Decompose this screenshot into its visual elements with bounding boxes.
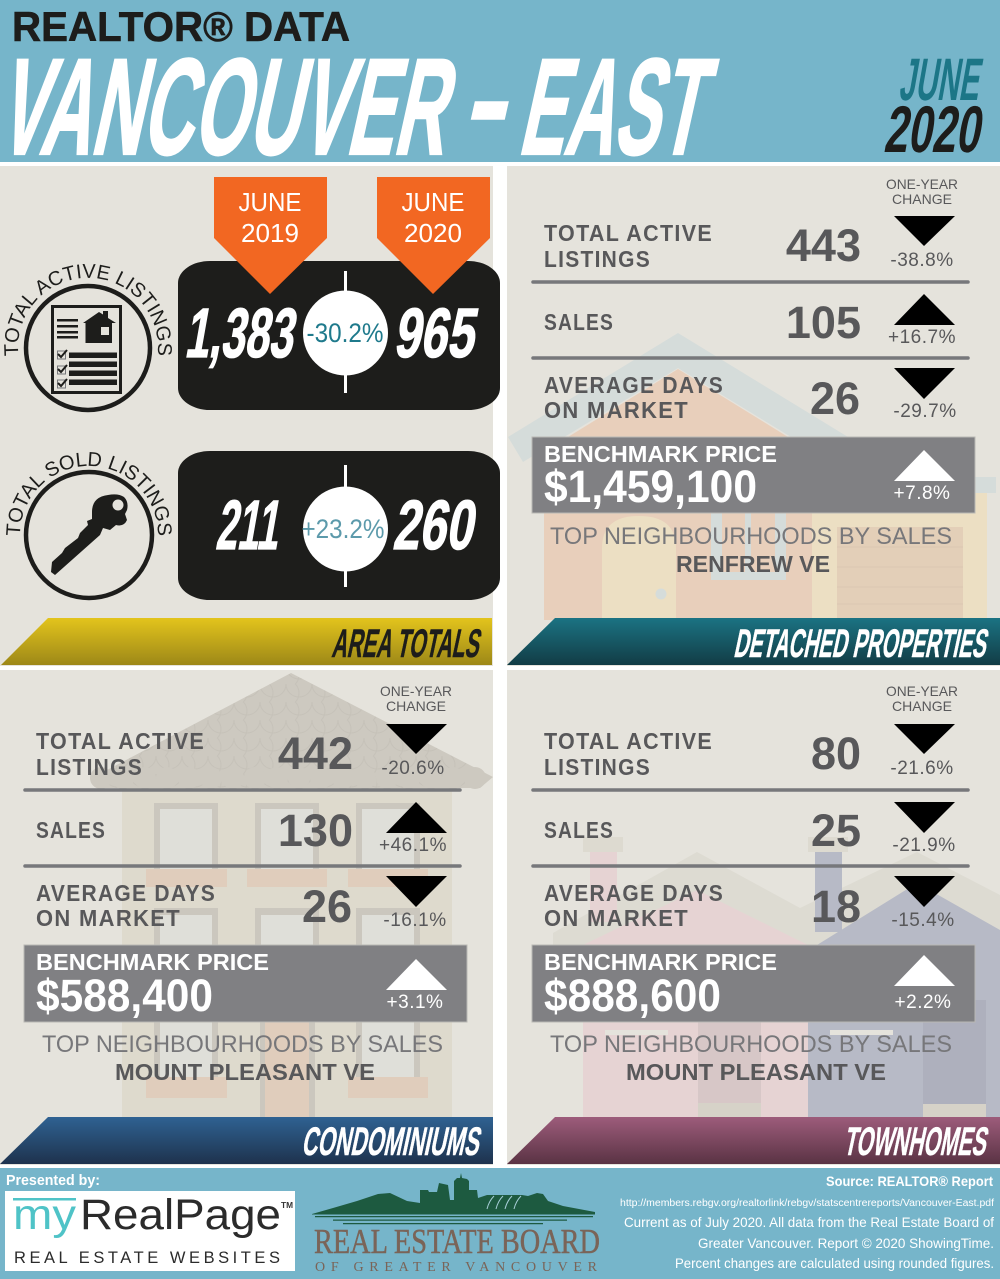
source notes: http://members.rebgv.org/realtorlink/rebgv/statscentrereports/Vancouver-East.pdf (620, 1198, 994, 1209)
panel: condominiums (0, 670, 493, 1165)
stat: active listings: TOTAL ACTIVE (36, 728, 205, 754)
stat: sales: -21.9% (892, 835, 956, 856)
top neighbourhoods (42, 1031, 443, 1085)
heading: REALTOR DATA: REALTOR® DATA (12, 3, 350, 50)
tag: June 2019: 2019 (241, 218, 299, 248)
logo: myRealPage (5, 1191, 295, 1271)
benchmark price: BENCHMARK PRICE (36, 949, 269, 975)
presented by: Presented by: (6, 1172, 100, 1189)
stat: sales: 105 (786, 297, 861, 348)
background illustration: townhouses (553, 837, 1000, 1117)
stat: active listings: ONE-YEAR (886, 176, 958, 192)
stat: days on market: -16.1% (383, 910, 447, 931)
stat: sales (36, 802, 447, 856)
stat: days on market: AVERAGE DAYS (544, 880, 724, 906)
footer band (0, 1168, 1000, 1279)
panel: detached properties (507, 166, 1000, 666)
tag: June 2019: JUNE (238, 187, 302, 217)
stat: active listings: LISTINGS (544, 754, 651, 780)
stat: days on market: AVERAGE DAYS (36, 880, 216, 906)
stat: active listings: CHANGE (892, 191, 952, 207)
stat: days on market: 26 (810, 373, 860, 424)
stat: days on market (544, 368, 957, 424)
top neighbourhoods (550, 1031, 952, 1085)
stat: active listings: LISTINGS (544, 246, 651, 272)
stat: days on market: AVERAGE DAYS (544, 372, 724, 398)
source notes: Current as of July 2020. All data from the Real Estate Board of (624, 1214, 994, 1230)
stat: active listings: CHANGE (386, 698, 446, 714)
top neighbourhoods (550, 523, 952, 577)
top neighbourhoods: TOP NEIGHBOURHOODS BY SALES (550, 1031, 952, 1058)
benchmark price (24, 945, 467, 1022)
stat: active listings (544, 683, 958, 780)
stat: active listings: ONE-YEAR (380, 683, 452, 699)
stat: active listings: ONE-YEAR (886, 683, 958, 699)
source notes: Greater Vancouver. Report © 2020 ShowingTime. (698, 1235, 994, 1251)
stat: active listings: -38.8% (890, 250, 954, 271)
banner: area totals: AREA TOTALS (329, 620, 486, 666)
stat: sales: SALES (544, 309, 614, 335)
banner: condominiums: CONDOMINIUMS (299, 1118, 486, 1164)
stat: active listings: TOTAL ACTIVE (544, 728, 713, 754)
stat: days on market: -15.4% (891, 910, 955, 931)
background illustration: condo building (90, 673, 493, 1117)
tag: June 2020 (377, 177, 490, 294)
comparison: active listings: 1,383 (181, 293, 303, 372)
stat: active listings: LISTINGS (36, 754, 143, 780)
logo: Real Estate Board of Greater Vancouver: REAL ESTATE BOARD (314, 1222, 600, 1261)
background illustration: detached house (508, 333, 996, 620)
logo: myRealPage: RealPage (80, 1191, 281, 1239)
stat: days on market: ON MARKET (544, 905, 689, 931)
top neighbourhoods: MOUNT PLEASANT VE (626, 1059, 886, 1085)
benchmark price (532, 945, 975, 1022)
benchmark price: +3.1% (387, 992, 443, 1013)
stat: sales: 130 (278, 805, 353, 856)
stat: days on market (544, 876, 955, 932)
tag: June 2020: 2020 (404, 218, 462, 248)
banner: condominiums (0, 1117, 493, 1164)
comparison: active listings (181, 271, 484, 393)
title: Vancouver - East: VANCOUVER (0, 31, 470, 184)
stat: active listings (36, 683, 452, 780)
active listings pill (178, 261, 500, 410)
stat: active listings (544, 176, 958, 272)
curved label: total sold listings: TOTAL SOLD LISTINGS (6, 452, 172, 536)
title: Vancouver - East: - (454, 23, 530, 176)
source notes (620, 1173, 994, 1271)
stat: sales: SALES (36, 817, 106, 843)
benchmark price: $888,600 (544, 970, 721, 1021)
banner: area totals (1, 618, 492, 666)
comparison: sold listings (212, 465, 483, 587)
top neighbourhoods: TOP NEIGHBOURHOODS BY SALES (550, 523, 952, 550)
tag: June 2019 (214, 177, 327, 294)
comparison: sold listings: 260 (389, 485, 483, 564)
stat: days on market: ON MARKET (544, 397, 689, 423)
benchmark price: +2.2% (895, 992, 951, 1013)
stat: active listings: CHANGE (892, 698, 952, 714)
curved label: total active listings: TOTAL ACTIVE LISTINGS (4, 264, 172, 356)
stat: sales (544, 802, 956, 856)
panel: townhomes (507, 670, 1000, 1165)
icon: listing document (26, 286, 150, 410)
top neighbourhoods: RENFREW VE (676, 551, 830, 577)
benchmark price: $588,400 (36, 970, 213, 1021)
banner: detached properties (507, 618, 1000, 666)
stat: active listings: 443 (786, 220, 861, 271)
logo: Real Estate Board of Greater Vancouver (312, 1173, 600, 1275)
comparison: active listings: -30.2% (306, 318, 384, 348)
stat: active listings: -20.6% (381, 758, 445, 779)
stat: days on market: 18 (811, 881, 861, 932)
comparison: active listings: 965 (390, 293, 484, 372)
top neighbourhoods: TOP NEIGHBOURHOODS BY SALES (42, 1031, 443, 1058)
title: Vancouver - East: EAST (510, 31, 726, 184)
benchmark price: $1,459,100 (544, 461, 757, 512)
stat: days on market: ON MARKET (36, 905, 181, 931)
stat: active listings: 442 (278, 728, 353, 779)
stat: sales: +46.1% (379, 835, 447, 856)
stat: active listings: 80 (811, 728, 861, 779)
stat: active listings: TOTAL ACTIVE (544, 220, 713, 246)
stat: days on market: -29.7% (893, 401, 957, 422)
benchmark price: +7.8% (894, 483, 950, 504)
icon: key (26, 472, 152, 598)
logo: myRealPage: my (13, 1191, 77, 1239)
stat: sales: +16.7% (888, 327, 956, 348)
stat: sales: SALES (544, 817, 614, 843)
benchmark price (532, 437, 975, 513)
sold listings pill (178, 451, 500, 600)
header band (0, 0, 1000, 184)
logo: myRealPage: TM (281, 1201, 293, 1210)
stat: active listings: -21.6% (890, 758, 954, 779)
logo: myRealPage: REAL ESTATE WEBSITES (14, 1249, 280, 1267)
panel: area totals (0, 166, 500, 666)
banner: townhomes (507, 1117, 1000, 1164)
comparison: sold listings: 211 (212, 485, 288, 564)
comparison: sold listings: +23.2% (302, 514, 384, 544)
benchmark price: BENCHMARK PRICE (544, 441, 777, 467)
tag: June 2020: JUNE (402, 187, 464, 217)
stat: sales (544, 294, 956, 348)
stat: sales: 25 (811, 805, 861, 856)
benchmark price: BENCHMARK PRICE (544, 949, 777, 975)
logo: Real Estate Board of Greater Vancouver: OF GREATER VANCOUVER (315, 1260, 598, 1275)
stat: days on market: 26 (302, 881, 352, 932)
stat: days on market (36, 876, 447, 932)
top neighbourhoods: MOUNT PLEASANT VE (115, 1059, 375, 1085)
